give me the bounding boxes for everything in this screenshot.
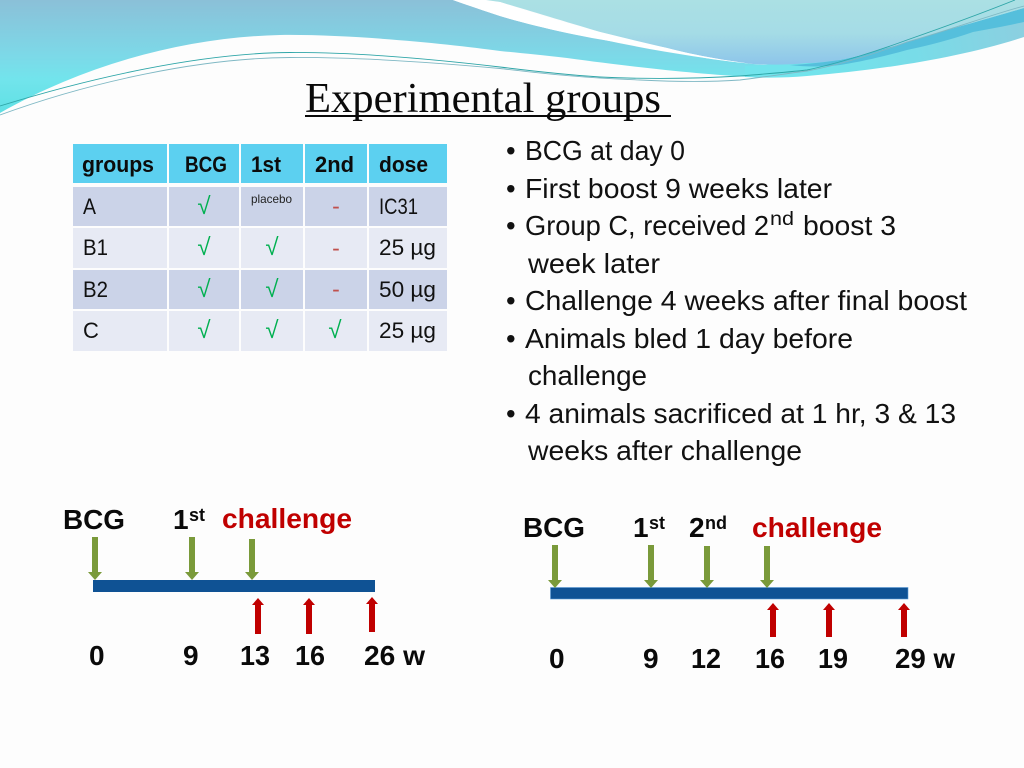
table row C [73,311,447,351]
table header row: 1st [251,152,282,177]
timeline: left, 26 weeks [63,503,425,671]
timeline labels: left top: BCG [63,504,125,535]
bullet list: protocol notes: Animals bled 1 day before [525,323,853,354]
wave: upper light shape [470,0,1024,65]
bullet list: protocol notes: • [506,398,516,429]
bullet list: protocol notes: • [506,173,516,204]
wave: right lower band [745,15,1024,78]
bullet list: protocol notes: nd [770,209,794,230]
timeline bar: right [550,588,908,599]
timeline labels: left top: challenge [222,503,352,534]
timeline labels: right top: st [649,513,665,533]
wave: thin lines [0,0,1024,115]
table row B2: - [332,276,340,302]
header wave decoration [0,0,1024,115]
bullet list: protocol notes: Group C, received 2 [525,210,769,241]
timeline labels: right top: 1 [633,512,649,543]
week labels: right: 0 [549,643,565,674]
table row A: - [332,193,340,219]
bullet list: protocol notes: BCG at day 0 [525,135,685,166]
bullet list: protocol notes: Challenge 4 weeks after final boost [525,285,967,316]
table header row: groups [82,152,154,177]
table row B2 [73,270,447,309]
red arrows: right [767,603,910,637]
table row B2: B2 [83,277,108,302]
timeline labels: left top: 1 [173,504,189,535]
table row B1: - [332,235,340,261]
week labels: left [89,640,425,671]
bullet list: protocol notes: • [506,323,516,354]
bullet list: protocol notes: week later [527,248,660,279]
bullet list: protocol notes [506,135,967,466]
table header row [73,144,447,183]
table row C: √ [328,317,342,344]
bullet list: protocol notes: challenge [528,360,647,391]
bullet list: protocol notes: First boost 9 weeks later [525,173,832,204]
table row A: placebo [251,192,292,206]
timeline labels: right top [523,512,882,543]
week labels: right [549,643,955,674]
table row A: IC31 [379,194,418,219]
table row B2: 50 µg [379,277,436,302]
table row B1: B1 [83,235,108,260]
timeline labels: left top [63,503,352,535]
week labels: left: 13 [240,640,270,671]
green arrows: right [548,545,774,588]
table row C: √ [197,317,211,344]
week labels: right: 16 [755,643,785,674]
table row C: C [83,318,99,343]
bullet list: protocol notes: • [506,135,516,166]
table row B1: √ [197,234,211,261]
table header row: dose [379,152,428,177]
bullet list: protocol notes: • [506,210,516,241]
week labels: left: 26 w [364,640,425,671]
table row C: 25 µg [379,318,436,343]
table row A: √ [197,193,211,220]
red arrows: left [252,597,378,634]
week labels: left: 0 [89,640,105,671]
table row B1: 25 µg [379,235,436,260]
green arrows: left [88,537,259,580]
table row B1 [73,228,447,268]
wave: dark blue ribbon [790,8,1024,66]
title: Experimental groups [305,76,661,122]
wave: main left and centre band [0,0,840,113]
table row B2: √ [265,276,279,303]
bullet list: protocol notes: boost 3 [803,210,896,241]
wave: white ribbon [453,0,753,64]
week labels: left: 9 [183,640,199,671]
week labels: left: 16 [295,640,325,671]
timeline bar: left [93,580,375,592]
table header row: 2nd [315,152,354,177]
timeline labels: right top: BCG [523,512,585,543]
table: experimental groups [73,144,447,351]
bullet list: protocol notes: weeks after challenge [527,435,802,466]
week labels: right: 19 [818,643,848,674]
bullet list: protocol notes: • [506,285,516,316]
week labels: right: 12 [691,643,721,674]
table row A: A [83,194,96,219]
timeline: right, 29 weeks [523,512,955,674]
table row B1: √ [265,234,279,261]
week labels: right: 29 w [895,643,955,674]
timeline labels: left top: st [189,505,205,525]
table row C: √ [265,317,279,344]
bullet list: protocol notes: 4 animals sacrificed at 1 hr, 3 & 13 [525,398,956,429]
timeline labels: right top: nd [705,513,727,533]
timeline labels: right top: challenge [752,512,882,543]
week labels: right: 9 [643,643,659,674]
table row B2: √ [197,276,211,303]
table header row: BCG [185,152,227,177]
timeline labels: right top: 2 [689,512,705,543]
table row A [73,187,447,226]
